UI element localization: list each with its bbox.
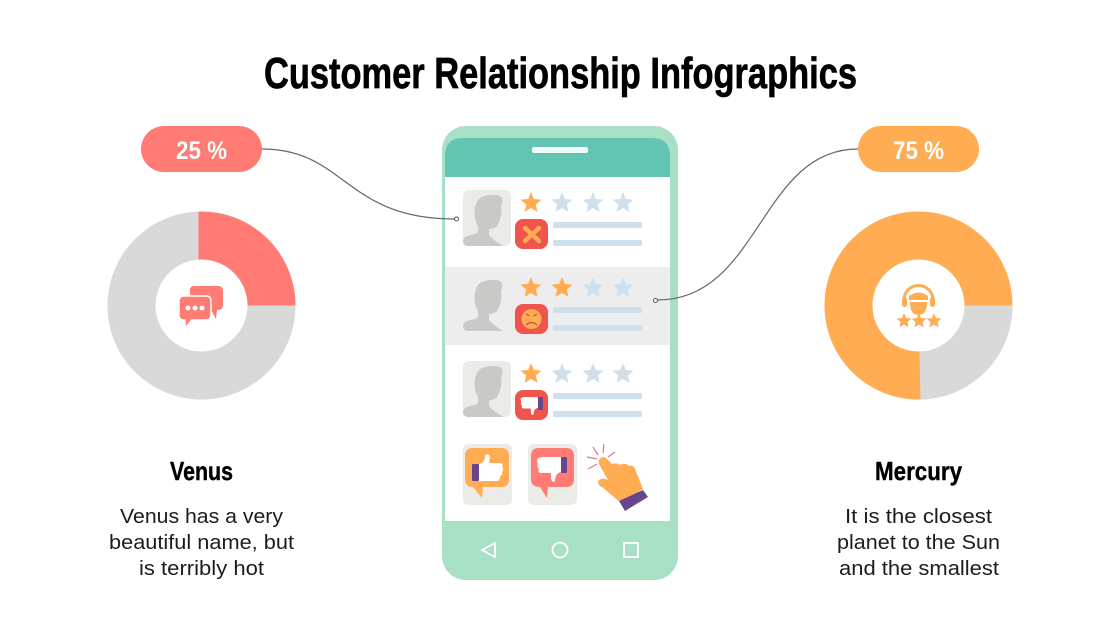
connector dot: second review [654,298,658,302]
review row 1 [463,190,642,249]
heading: Venus: Venus [170,456,233,486]
connector: 25% to first review [262,149,454,219]
review row 3 [463,361,642,420]
body: Mercury description: It is the closest [845,506,992,528]
connector dot: first review [454,217,458,221]
text block: Mercury [837,456,1006,580]
pill: 25 % [141,126,262,172]
phone screen [445,177,670,521]
icon: support agent with stars [896,286,942,327]
icon: recents button [624,543,638,557]
pill: 75 % [858,126,979,172]
connector: 75% to second review [658,149,858,300]
body: Venus description: is terribly hot [139,558,264,580]
speaker [532,147,588,153]
phone header [445,138,670,177]
thumbs up card [463,444,512,505]
icon: home button [552,542,568,558]
body: Mercury description: planet to the Sun [837,532,1000,554]
icon: back button [482,543,495,557]
heading: Mercury: Mercury [875,456,962,486]
body: Mercury description: and the smallest [839,558,999,580]
pill: 25 %: 25 % [176,137,227,165]
review row 2 [463,277,642,334]
donut chart: Mercury 75% [824,212,1013,400]
text block: Venus [109,456,300,580]
icon: chat bubbles [179,286,223,328]
thumbs down card [528,444,577,505]
phone body [442,126,678,580]
icon: pointing hand [587,444,648,511]
donut chart: Venus 25% [108,212,296,400]
phone [442,126,678,580]
body: Venus description: Venus has a very [120,506,283,528]
body: Venus description: beautiful name, but [109,532,294,554]
highlighted row [445,267,670,345]
title: Customer Relationship Infographics [264,49,857,98]
pill: 75 %: 75 % [893,137,944,165]
